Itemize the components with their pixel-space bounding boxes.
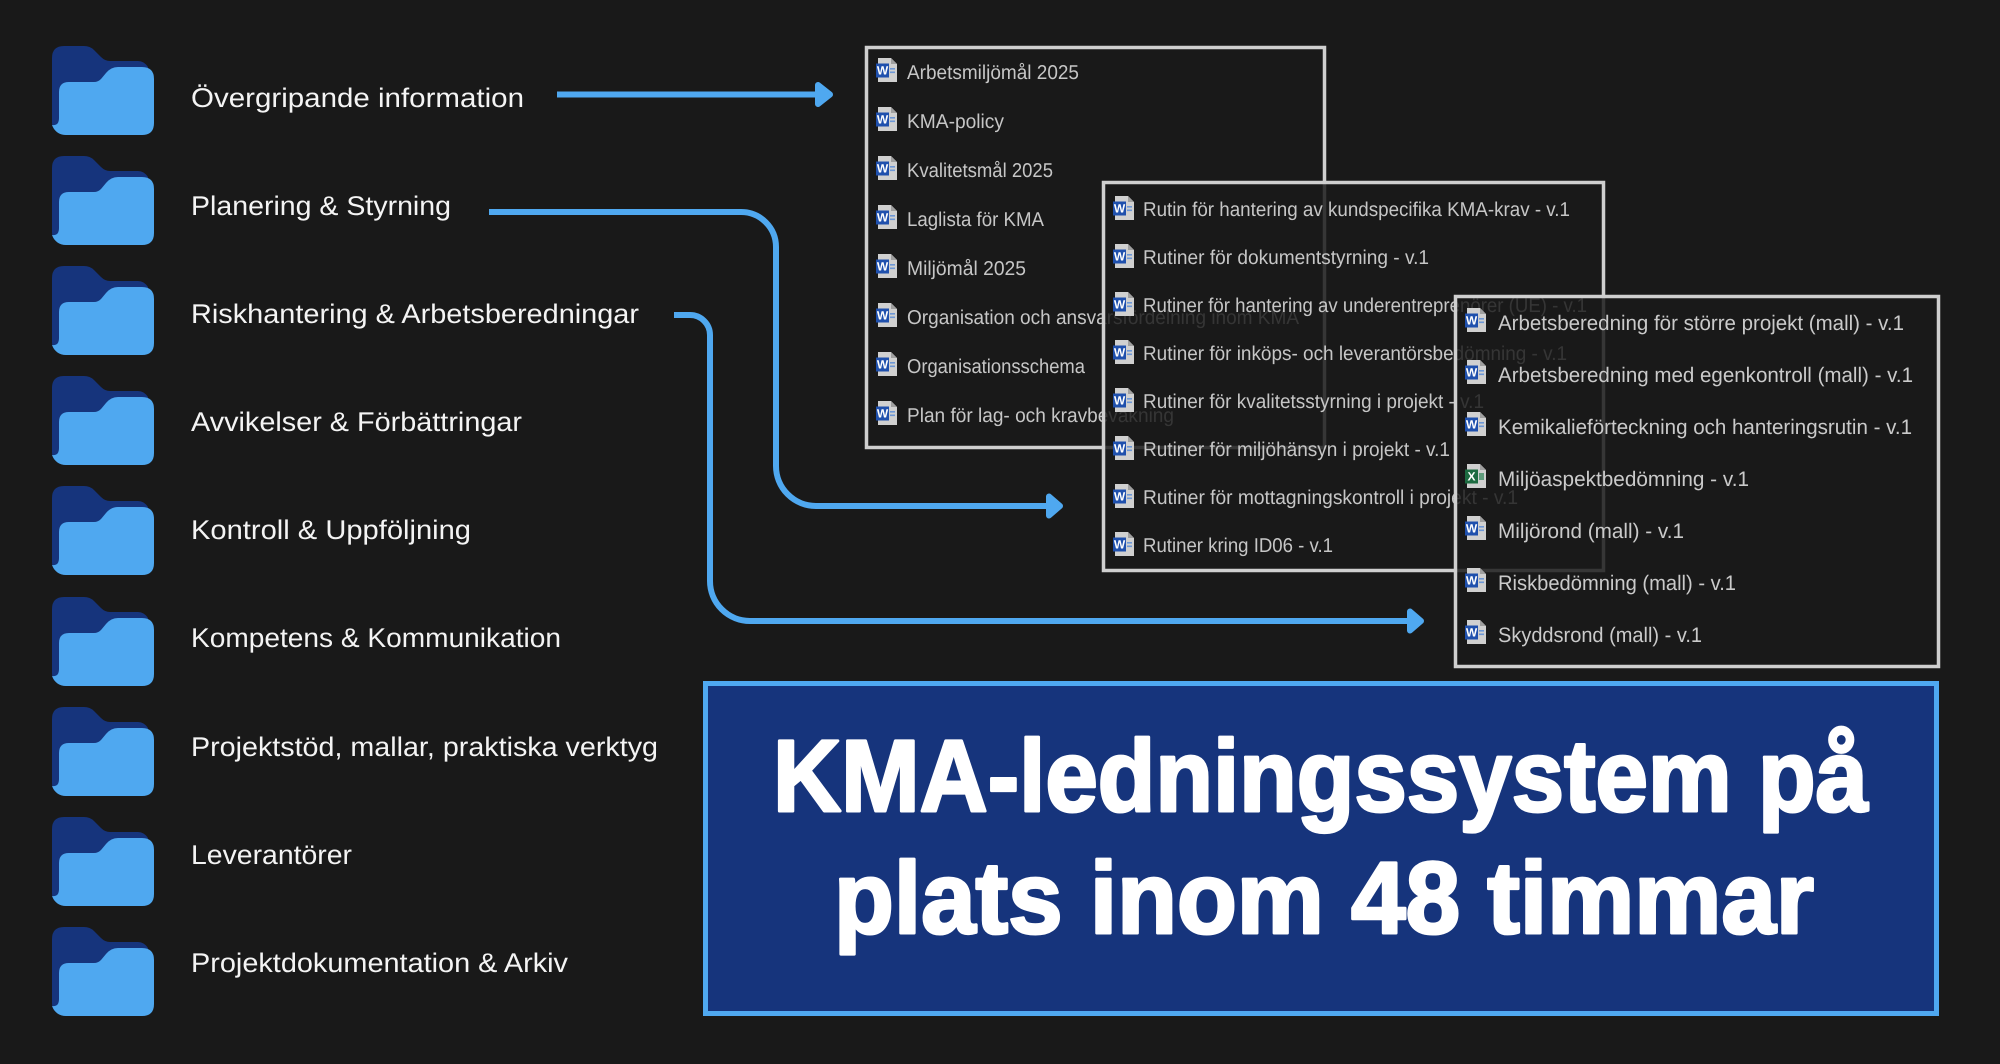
file: Rutiner för inköps- och leverantörsbedömning: Rutiner för inköps- och leverantörsbedömning - v.1	[1143, 343, 1567, 365]
file: Arbetsberedning med egenkontroll (mall): Arbetsberedning med egenkontroll (mall) - v.1	[1498, 364, 1913, 387]
arrow: Planering & Styrning to panel 2	[489, 212, 1060, 516]
panel: Planering & Styrning files	[1104, 182, 1604, 570]
file: Miljömål 2025: Miljömål 2025	[907, 258, 1026, 280]
folder row: Projektstöd, mallar, praktiska verktyg	[52, 707, 658, 796]
folder row: Kompetens & Kommunikation: Kompetens & Kommunikation	[191, 623, 561, 653]
file: Rutin för hantering av kundspecifika KMA-krav: Rutin för hantering av kundspecifika KMA-krav - v.1	[1143, 199, 1570, 221]
file: Laglista för KMA: Laglista för KMA	[907, 209, 1045, 231]
file: KMA-policy	[876, 107, 1004, 133]
file: Arbetsberedning för större projekt (mall): Arbetsberedning för större projekt (mall) - v.1	[1498, 312, 1904, 335]
folder row: Avvikelser & Förbättringar	[52, 376, 522, 465]
folder row: Projektdokumentation & Arkiv	[52, 927, 569, 1016]
file: Riskbedömning (mall): Riskbedömning (mall) - v.1	[1498, 572, 1736, 595]
folder row: Leverantörer	[52, 817, 352, 906]
file: Laglista för KMA	[876, 205, 1045, 231]
folder row: Kompetens & Kommunikation	[52, 597, 561, 686]
folder row: Riskhantering & Arbetsberedningar	[52, 266, 639, 355]
folder row: Avvikelser & Förbättringar: Avvikelser & Förbättringar	[191, 407, 522, 437]
panel: Riskhantering & Arbetsberedningar files	[1456, 296, 1938, 666]
folder row: Projektstöd, mallar, praktiska verktyg: Projektstöd, mallar, praktiska verktyg	[191, 732, 658, 762]
folder row: Planering & Styrning	[52, 156, 451, 245]
heading line 2: plats inom 48 timmar	[834, 841, 1814, 955]
file: Organisationsschema: Organisationsschema	[907, 356, 1086, 378]
file: Kvalitetsmål 2025: Kvalitetsmål 2025	[907, 160, 1053, 182]
heading line 1: KMA-ledningssystem på	[773, 719, 1868, 833]
folder row: Projektdokumentation & Arkiv: Projektdokumentation & Arkiv	[191, 948, 569, 978]
file: Rutiner för dokumentstyrning: Rutiner för dokumentstyrning - v.1	[1143, 247, 1429, 269]
folder row: Övergripande information	[52, 46, 524, 135]
arrow: Övergripande information to panel 1	[557, 85, 830, 104]
folder row: Kontroll & Uppföljning: Kontroll & Uppföljning	[191, 515, 471, 545]
file: Arbetsmiljömål 2025	[876, 58, 1079, 84]
file: Arbetsmiljömål 2025: Arbetsmiljömål 2025	[907, 62, 1079, 84]
file: Organisationsschema	[876, 352, 1086, 378]
folder list	[52, 46, 658, 1016]
file: Miljöaspektbedömning: Miljöaspektbedömning - v.1	[1498, 468, 1749, 491]
title banner	[706, 684, 1936, 1014]
file: Miljömål 2025	[876, 254, 1026, 280]
file: Skyddsrond (mall): Skyddsrond (mall) - v.1	[1498, 624, 1702, 647]
folder row: Leverantörer: Leverantörer	[191, 840, 352, 870]
file: Rutiner för mottagningskontroll i projekt: Rutiner för mottagningskontroll i projekt - v.1	[1143, 487, 1518, 509]
file: Kemikalieförteckning och hanteringsrutin: Kemikalieförteckning och hanteringsrutin - v.1	[1498, 416, 1912, 439]
arrow: Riskhantering & Arbetsberedningar to panel 3	[674, 315, 1421, 630]
folder row: Planering & Styrning: Planering & Styrning	[191, 191, 451, 221]
file: Rutiner för miljöhänsyn i projekt: Rutiner för miljöhänsyn i projekt - v.1	[1143, 439, 1450, 461]
file: Miljörond (mall): Miljörond (mall) - v.1	[1498, 520, 1684, 543]
file: Plan för lag- och kravbevakning: Plan för lag- och kravbevakning	[907, 405, 1174, 427]
panel: Övergripande information files	[866, 48, 1324, 448]
file: KMA-policy: KMA-policy	[907, 111, 1004, 133]
folder row: Övergripande information: Övergripande information	[191, 83, 524, 113]
folder row: Riskhantering & Arbetsberedningar: Riskhantering & Arbetsberedningar	[191, 299, 639, 329]
file: Kvalitetsmål 2025	[876, 156, 1053, 182]
file: Organisation och ansvarsfördelning inom KMA: Organisation och ansvarsfördelning inom KMA	[907, 307, 1300, 329]
file: Rutiner för kvalitetsstyrning i projekt: Rutiner för kvalitetsstyrning i projekt - v.1	[1143, 391, 1484, 413]
folder row: Kontroll & Uppföljning	[52, 486, 471, 575]
file: Rutiner kring ID06: Rutiner kring ID06 - v.1	[1143, 535, 1333, 557]
file: Rutiner för hantering av underentreprenörer: Rutiner för hantering av underentreprenörer (UE) - v.1	[1143, 295, 1587, 317]
